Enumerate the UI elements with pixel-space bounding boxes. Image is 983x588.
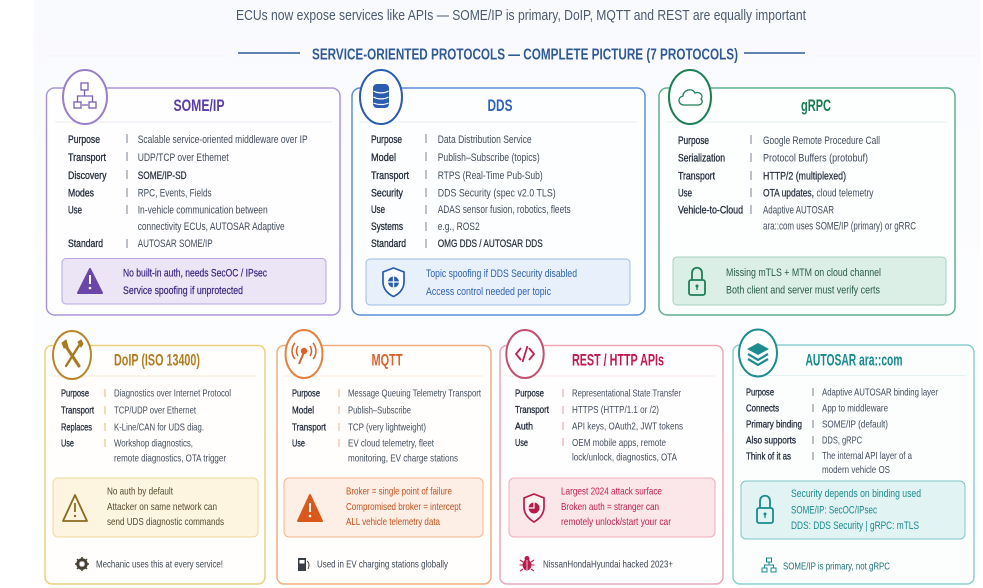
heading: MQTT: MQTT — [372, 350, 403, 370]
protocol facts: Representational State Transfer — [572, 388, 681, 400]
protocol facts: Use — [292, 438, 305, 450]
protocol facts: SOME/IP-SD — [138, 170, 187, 182]
protocol facts: ara::com uses SOME/IP (primary) or gRRC — [763, 220, 916, 232]
protocol facts: Replaces — [61, 422, 92, 434]
protocol facts: Publish–Subscribe (topics) — [438, 152, 540, 164]
callout: SOME/IP risk: Service spoofing if unprotected — [123, 285, 243, 297]
protocol facts: TCP/UDP over Ethernet — [114, 404, 196, 416]
protocol facts: SOME/IP (default) — [822, 418, 888, 430]
protocol facts: Transport — [61, 404, 94, 416]
protocol facts: Vehicle-to-Cloud — [678, 204, 743, 216]
protocol facts: Diagnostics over Internet Protocol — [114, 388, 231, 400]
callout: MQTT risk: ALL vehicle telemetry data — [346, 516, 440, 528]
protocol facts: AUTOSAR SOME/IP — [138, 238, 213, 250]
callout: DoIP risk — [53, 478, 258, 537]
protocol facts: UDP/TCP over Ethernet — [138, 152, 229, 164]
callout: AUTOSAR security: SOME/IP: SecOC/IPsec — [791, 504, 877, 516]
callout: MQTT risk — [284, 478, 483, 537]
icon: hierarchy network — [63, 70, 107, 124]
protocol facts: Standard — [68, 238, 103, 250]
heading: gRPC: gRPC — [801, 96, 831, 115]
callout: MQTT risk: Compromised broker = intercept — [346, 501, 461, 513]
protocol facts: Purpose — [371, 134, 402, 146]
icon: database — [360, 70, 402, 124]
protocol facts: Publish–Subscribe — [348, 404, 411, 416]
callout: DoIP risk: Attacker on same network can — [107, 501, 217, 513]
protocol facts — [61, 388, 231, 464]
protocol facts: Connects — [746, 402, 779, 414]
protocol facts: Also supports — [746, 434, 796, 446]
callout: AUTOSAR security: Security depends on binding used — [791, 488, 921, 500]
callout: REST risk — [509, 478, 715, 537]
protocol facts: ADAS sensor fusion, robotics, fleets — [438, 204, 571, 216]
section heading: SERVICE-ORIENTED PROTOCOLS — COMPLETE PICTURE (7 PROTOCOLS) — [312, 46, 738, 64]
protocol facts: Transport — [371, 170, 409, 182]
callout: DDS risk: Access control needed per topic — [426, 286, 551, 298]
panel: MQTT — [277, 330, 491, 584]
protocol facts: Purpose — [292, 388, 320, 400]
protocol facts: OEM mobile apps, remote — [572, 437, 666, 449]
heading: DoIP: DoIP (ISO 13400) — [114, 350, 200, 370]
protocol facts: Use — [678, 188, 692, 200]
protocol facts: Protocol Buffers (protobuf) — [763, 152, 868, 164]
protocol facts: OMG DDS / AUTOSAR DDS — [438, 238, 543, 250]
protocol facts: Systems — [371, 221, 403, 233]
callout: REST risk: remotely unlock/start your car — [561, 516, 671, 528]
callout: DoIP risk: No auth by default — [107, 486, 173, 498]
protocol facts: Transport — [68, 152, 106, 164]
protocol facts: Transport — [515, 404, 549, 416]
heading: DDS: DDS — [488, 96, 512, 115]
protocol facts: DDS Security (spec v2.0 TLS) — [438, 188, 556, 200]
protocol facts: Use — [68, 204, 82, 216]
protocol facts: API keys, OAuth2, JWT tokens — [572, 420, 683, 432]
protocol facts: Adaptive AUTOSAR — [763, 204, 834, 216]
protocol facts: Data Distribution Service — [438, 134, 532, 146]
protocol facts: monitoring, EV charge stations — [348, 452, 458, 464]
protocol facts: modern vehicle OS — [822, 464, 890, 476]
footer note: DoIP: Mechanic uses this at every service! — [96, 558, 223, 570]
footer note: MQTT — [298, 558, 449, 571]
protocol facts: HTTPS (HTTP/1.1 or /2) — [572, 404, 659, 416]
callout: AUTOSAR security: DDS: DDS Security | gRPC: mTLS — [791, 520, 919, 532]
protocol facts: Primary binding — [746, 418, 802, 430]
protocol facts: Purpose — [678, 135, 709, 147]
footer note: REST — [520, 556, 673, 571]
protocol facts: Workshop diagnostics, — [114, 438, 193, 450]
callout: DDS risk: Topic spoofing if DDS Security disabled — [426, 268, 577, 280]
protocol facts: Discovery — [68, 170, 107, 182]
footer note: AUTOSAR — [762, 558, 890, 572]
protocol facts: HTTP/2 (multiplexed) — [763, 170, 846, 182]
protocol facts: Standard — [371, 238, 406, 250]
icon: broadcast antenna — [286, 330, 322, 378]
protocol facts: Use — [61, 438, 74, 450]
protocol facts: Adaptive AUTOSAR binding layer — [822, 386, 938, 398]
heading: REST / HTTP APIs: REST / HTTP APIs — [572, 350, 664, 370]
protocol facts: Message Queuing Telemetry Transport — [348, 388, 481, 400]
protocol facts: TCP (very lightweight) — [348, 422, 426, 434]
protocol facts: In-vehicle communication between — [138, 204, 268, 216]
protocol facts — [515, 388, 683, 464]
heading: AUTOSAR ara::com: AUTOSAR ara::com — [806, 350, 902, 370]
panel: gRPC — [659, 70, 955, 315]
protocol facts: Model — [292, 404, 314, 416]
panel: AUTOSAR ara::com — [733, 330, 974, 584]
protocol facts — [746, 386, 938, 476]
callout: gRPC risk: Missing mTLS + MTM on cloud channel — [726, 267, 881, 279]
protocol facts: Model — [371, 152, 396, 164]
protocol facts: Google Remote Procedure Call — [763, 135, 880, 147]
protocol facts: K-Line/CAN for UDS diag. — [114, 422, 204, 434]
protocol facts: Serialization — [678, 152, 725, 164]
callout: REST risk: Largest 2024 attack surface — [561, 486, 662, 498]
footer note: REST: NissanHondaHyundai hacked 2023+ — [543, 558, 673, 570]
protocol facts: The internal API layer of a — [822, 450, 912, 462]
protocol facts — [292, 388, 481, 464]
protocol facts: Use — [371, 204, 385, 216]
protocol facts: cloud telemetry — [816, 188, 874, 200]
icon: crossed tools — [53, 331, 91, 379]
protocol facts: connectivity ECUs, AUTOSAR Adaptive — [138, 221, 285, 233]
panel: REST / HTTP APIs — [500, 330, 723, 584]
protocol facts — [678, 135, 916, 232]
protocol facts: Security — [371, 188, 403, 200]
callout: SOME/IP risk: No built-in auth, needs SecOC / IPsec — [123, 268, 267, 280]
icon: code brackets — [506, 330, 544, 378]
protocol facts: Scalable service-oriented middleware over IP — [138, 134, 308, 146]
protocol facts: App to middleware — [822, 402, 888, 414]
panel: DDS — [352, 70, 645, 315]
protocol facts: e.g., ROS2 — [438, 221, 480, 233]
subtitle: ECUs now expose services like APIs — SOME/IP is primary, DoIP, MQTT and REST are equally important — [236, 7, 807, 24]
protocol facts: Transport — [292, 422, 326, 434]
protocol facts: Purpose — [515, 388, 544, 400]
callout: AUTOSAR security — [741, 481, 965, 539]
protocol facts: Think of it as — [746, 450, 791, 462]
protocol facts: RTPS (Real-Time Pub-Sub) — [438, 170, 543, 182]
protocol facts — [68, 134, 308, 250]
callout: gRPC risk — [673, 257, 946, 305]
protocol facts: Purpose — [61, 388, 89, 400]
callout: DoIP risk: send UDS diagnostic commands — [107, 516, 224, 528]
panel: SOME/IP — [46, 70, 340, 315]
protocol facts: lock/unlock, diagnostics, OTA — [572, 452, 677, 464]
icon: cloud — [669, 70, 711, 124]
protocol facts: Purpose — [746, 386, 774, 398]
protocol facts: Purpose — [68, 134, 100, 146]
protocol facts: Transport — [678, 170, 715, 182]
heading: SOME/IP: SOME/IP — [174, 96, 224, 115]
footer note: DoIP — [75, 557, 223, 571]
protocol facts: EV cloud telemetry, fleet — [348, 438, 434, 450]
protocol facts: DDS, gRPC — [822, 434, 862, 446]
protocol facts — [371, 134, 571, 250]
protocol facts: remote diagnostics, OTA trigger — [114, 452, 226, 464]
callout: gRPC risk: Both client and server must verify certs — [726, 284, 880, 296]
callout: DDS risk — [366, 259, 630, 305]
protocol facts: Use — [515, 437, 528, 449]
footer note: AUTOSAR: SOME/IP is primary, not gRPC — [783, 560, 890, 572]
protocol facts: Auth — [515, 420, 533, 432]
icon: stacked layers — [739, 330, 777, 376]
protocol facts: Modes — [68, 188, 94, 200]
panel: DoIP — [45, 331, 265, 584]
callout: MQTT risk: Broker = single point of failure — [346, 486, 452, 498]
protocol facts: RPC, Events, Fields — [138, 188, 212, 200]
callout: SOME/IP risk — [62, 258, 326, 304]
footer note: MQTT: Used in EV charging stations globally — [317, 558, 449, 570]
protocol facts: OTA updates, — [763, 188, 814, 200]
callout: REST risk: Broken auth = stranger can — [561, 501, 659, 513]
